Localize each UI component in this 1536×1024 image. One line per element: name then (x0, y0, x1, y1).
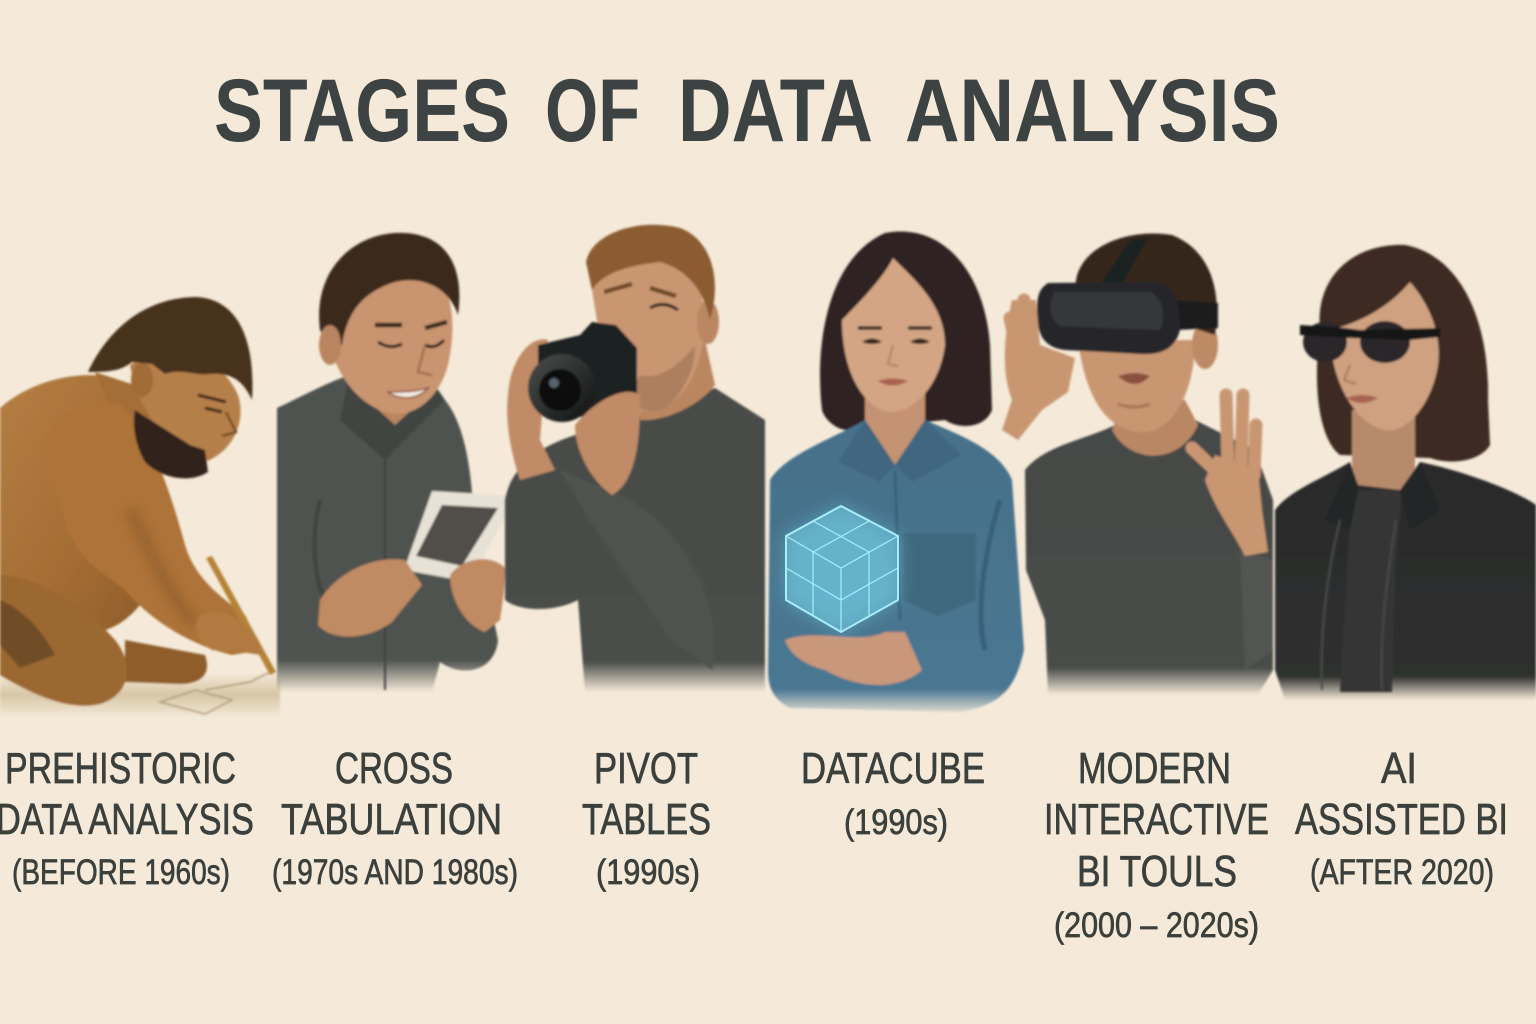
figure: prehistoric man drawing on the ground (0, 297, 280, 718)
label: prehistoric data analysis: (BEFORE 1960s) (12, 853, 230, 892)
label: AI assisted BI (1295, 744, 1508, 892)
label: cross tabulation: CROSS (335, 744, 453, 793)
label: pivot tables (582, 744, 711, 892)
label: modern interactive BI tools: MODERN (1078, 744, 1231, 793)
label: modern interactive BI tools: (2000 – 2020s) (1054, 906, 1259, 945)
figure: photographer with camera (505, 225, 765, 692)
figure: woman holding a glowing data cube (768, 232, 1024, 712)
title: DATA (678, 60, 873, 160)
title: STAGES (214, 60, 510, 160)
label: modern interactive BI tools: INTERACTIVE (1044, 795, 1269, 844)
label: prehistoric data analysis: PREHISTORIC (5, 744, 236, 793)
label: modern interactive BI tools (1044, 744, 1269, 945)
label: pivot tables: PIVOT (594, 744, 698, 793)
label: datacube: (1990s) (844, 803, 948, 842)
label: AI assisted BI: AI (1381, 744, 1417, 793)
label: datacube (801, 744, 985, 842)
label: pivot tables: TABLES (582, 795, 711, 844)
label: AI assisted BI: (AFTER 2020) (1310, 853, 1494, 892)
figure: woman with smart glasses (1275, 245, 1536, 700)
label: cross tabulation (272, 744, 518, 892)
title: ANALYSIS (905, 60, 1280, 160)
label: prehistoric data analysis (0, 744, 254, 892)
title (214, 60, 1280, 160)
figure: man reading a cross tabulation sheet (277, 233, 517, 692)
label: pivot tables: (1990s) (596, 853, 700, 892)
label: cross tabulation: (1970s AND 1980s) (272, 853, 518, 892)
label: prehistoric data analysis: DATA ANALYSIS (0, 795, 254, 844)
label: modern interactive BI tools: BI TOULS (1077, 847, 1237, 896)
label: datacube: DATACUBE (801, 744, 985, 793)
icon: raised left hand (1002, 300, 1075, 440)
figure: man wearing a VR headset (1002, 233, 1273, 695)
label: cross tabulation: TABULATION (281, 795, 502, 844)
icon: raised right hand (1192, 395, 1268, 556)
icon: glowing data cube (786, 506, 898, 632)
title: OF (545, 60, 640, 160)
